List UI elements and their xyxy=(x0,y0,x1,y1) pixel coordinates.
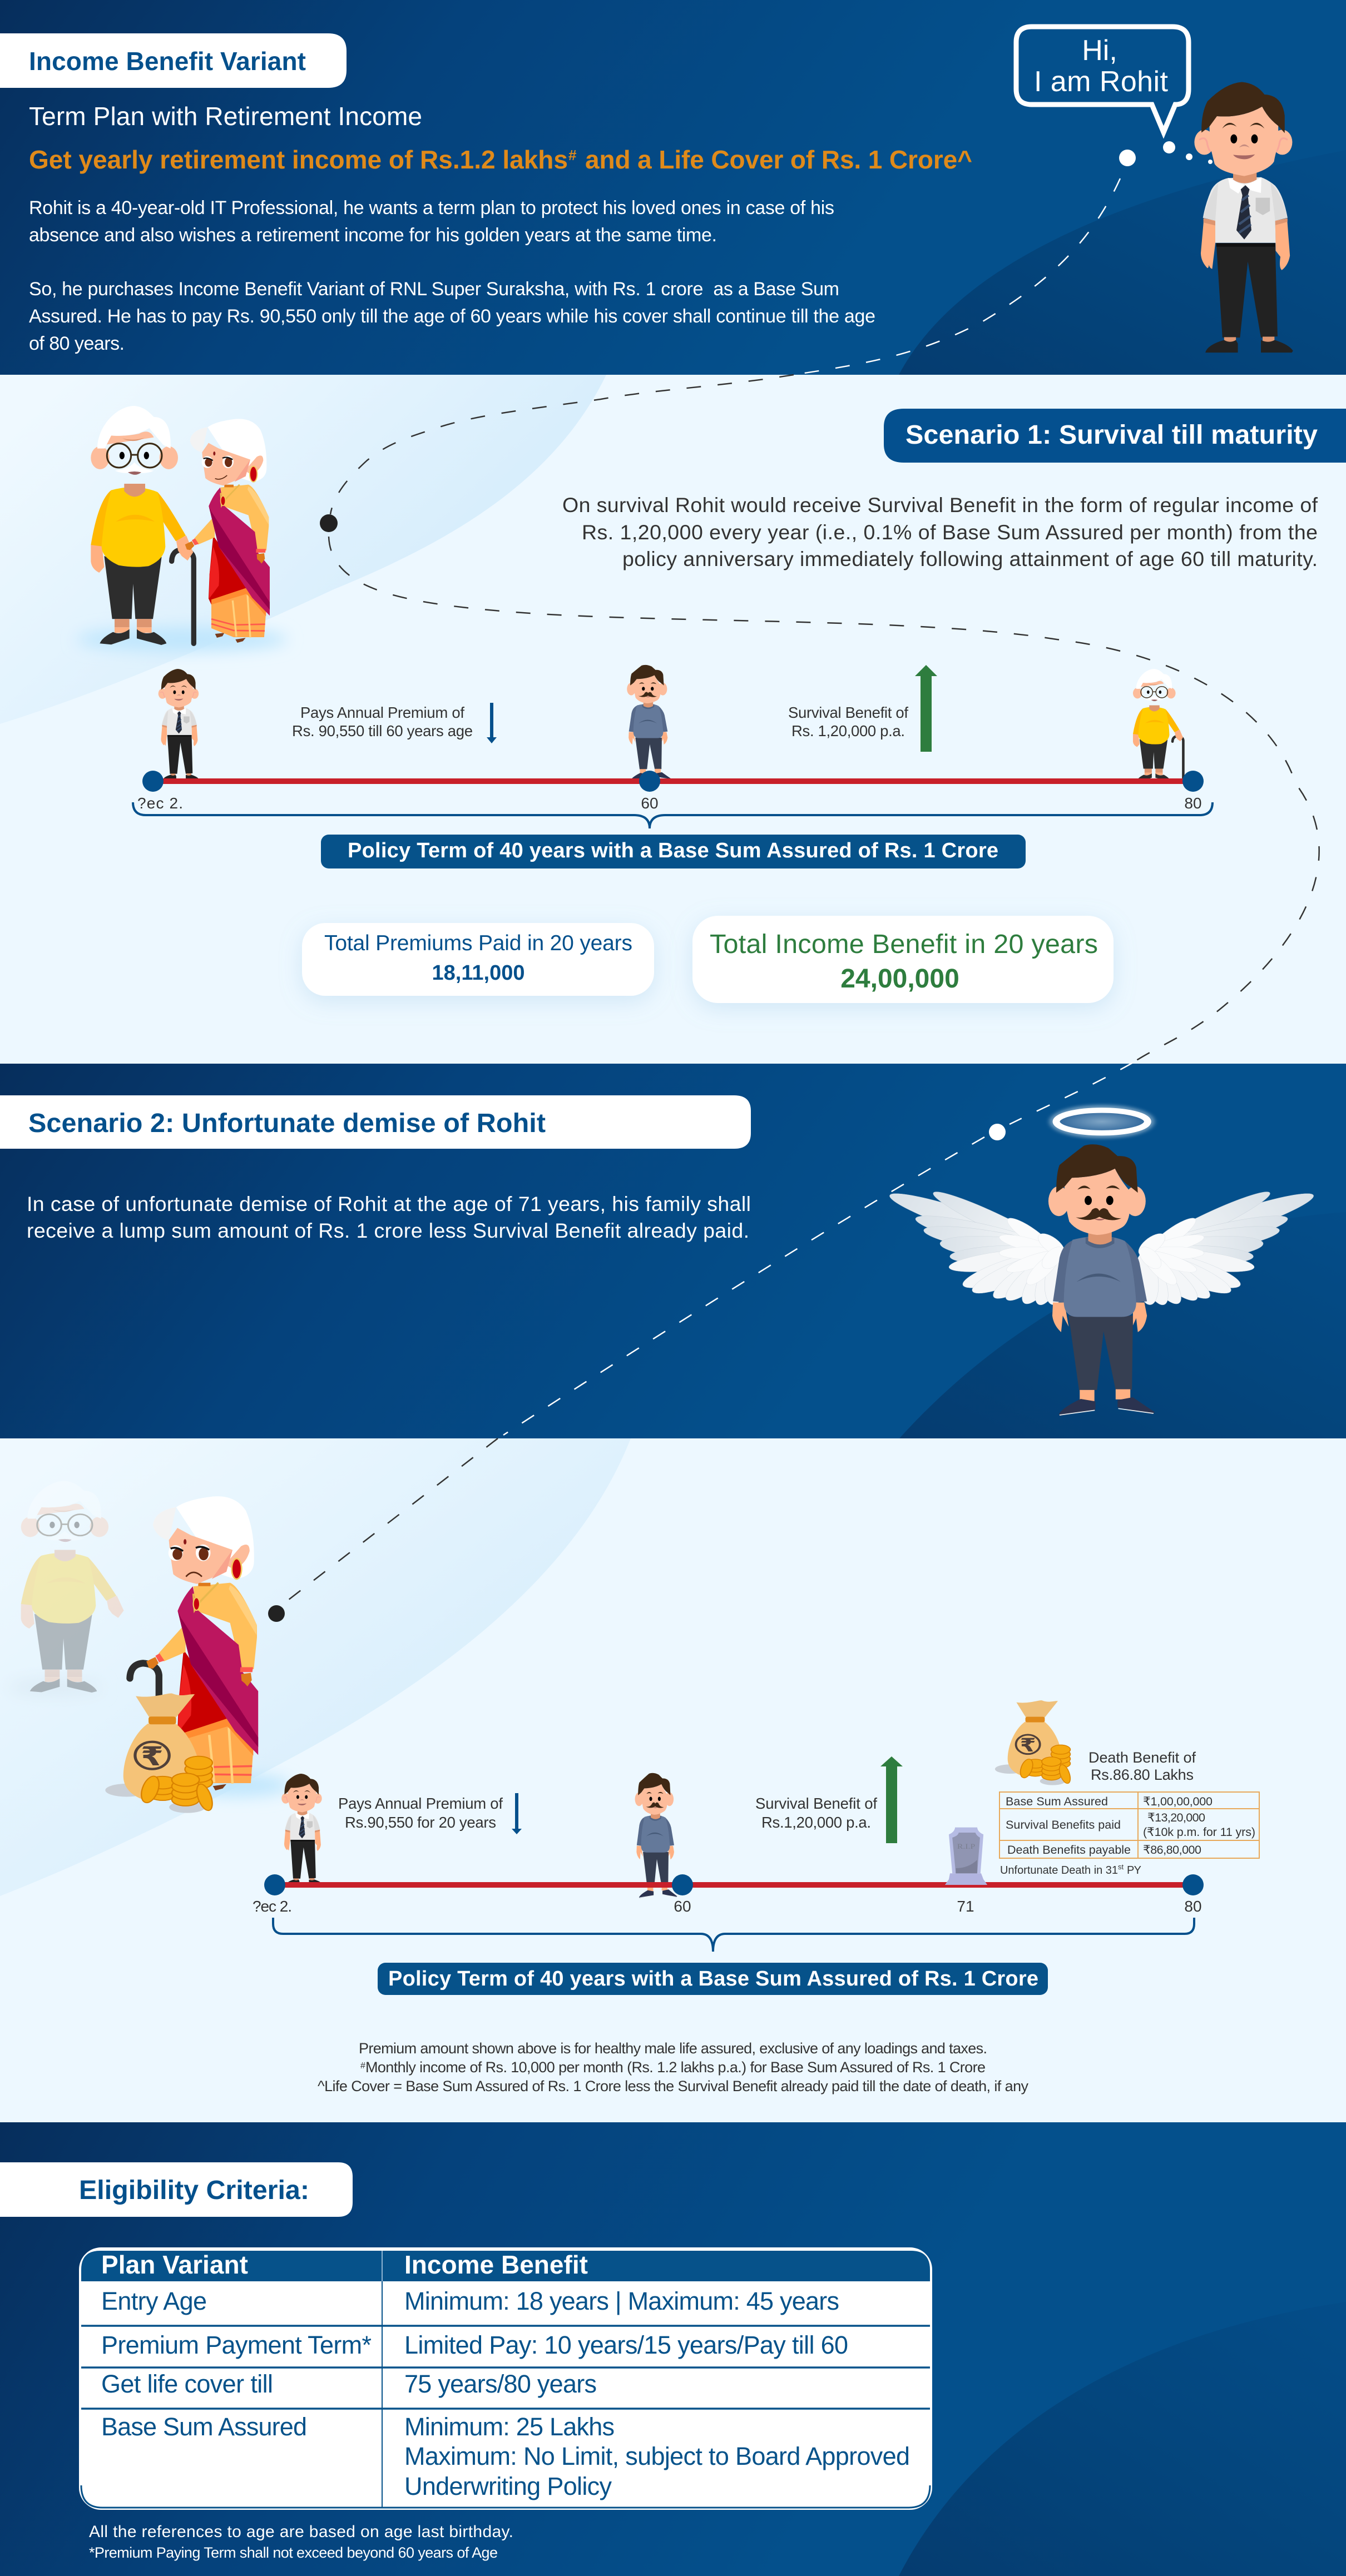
table: death benefit calculation: Survival Benefits paid xyxy=(1006,1818,1121,1832)
text block: Rohit story: Rohit is a 40-year-old IT Professional, he wants a term plan to protect his loved ones in case of his xyxy=(29,197,834,219)
text block: footnotes: Premium amount shown above is for healthy male life assured, exclusive of any loadings and taxes. xyxy=(359,2040,987,2057)
heading: income benefit variant xyxy=(0,33,347,88)
arrow: premium down xyxy=(512,1793,522,1834)
highlighted headline: Get yearly retirement income of Rs.1.2 lakhs xyxy=(29,145,568,174)
timeline: scenario 1: 80 xyxy=(1184,795,1202,812)
text block: footnotes: # xyxy=(360,2061,365,2071)
highlighted headline: and a Life Cover of Rs. 1 Crore^ xyxy=(585,145,972,174)
text block: scenario 2 description: In case of unfortunate demise of Rohit at the age of 71 years, his family shall xyxy=(27,1192,751,1215)
text block: Rohit story xyxy=(29,197,875,354)
figures: scenario 1 timeline xyxy=(159,665,1183,781)
label: survival benefit: Rs. 1,20,000 p.a. xyxy=(791,722,905,739)
timeline: scenario 2: ?ec 2. xyxy=(253,1898,292,1915)
table: eligibility: Minimum: 18 years | Maximum: 45 years xyxy=(404,2287,839,2315)
text block: scenario 1 description: policy anniversary immediately following attainment of age 60 till maturity. xyxy=(622,547,1318,570)
heading: scenario 2: Scenario 2: Unfortunate demise of Rohit xyxy=(28,1108,546,1138)
heading: income benefit variant: Income Benefit Variant xyxy=(29,47,306,76)
timeline: scenario 1: ?ec 2. xyxy=(137,795,183,812)
highlighted headline xyxy=(29,145,972,174)
text block: footnotes: ^Life Cover = Base Sum Assured of Rs. 1 Crore less the Survival Benefit already paid till the date of death, if any xyxy=(318,2078,1029,2094)
panel: eligibility xyxy=(0,2122,1346,2576)
heading: eligibility criteria xyxy=(0,2162,353,2217)
timeline: scenario 2: 60 xyxy=(674,1898,691,1915)
table: death benefit calculation xyxy=(999,1792,1259,1858)
label: policy term pill: Policy Term of 40 years with a Base Sum Assured of Rs. 1 Crore xyxy=(348,839,998,862)
timeline: scenario 1 xyxy=(137,771,1204,812)
panel: scenario 2 timeline xyxy=(0,1438,1346,2122)
table: eligibility: Base Sum Assured xyxy=(101,2413,307,2441)
connector: dashed journey line xyxy=(289,178,1319,1600)
label: unfortunate death: st xyxy=(1118,1863,1124,1871)
table: eligibility: Underwriting Policy xyxy=(404,2472,612,2500)
illustration: angel with wings and halo xyxy=(884,1108,1319,1416)
card: total income xyxy=(692,916,1114,1003)
table: death benefit calculation: Base Sum Assured xyxy=(1006,1795,1108,1808)
label: policy term pill xyxy=(321,835,1026,868)
panel: scenario 1 xyxy=(0,375,1346,1064)
text block: Rohit story: Assured. He has to pay Rs. 90,550 only till the age of 60 years while his cover shall continue till the age xyxy=(29,306,875,327)
table: death benefit calculation: ₹1,00,00,000 xyxy=(1143,1795,1213,1808)
text block: footnotes: Monthly income of Rs. 10,000 per month (Rs. 1.2 lakhs p.a.) for Base Sum Assured of Rs. 1 Crore xyxy=(365,2059,986,2076)
panel: introduction xyxy=(0,0,1346,375)
speech bubble xyxy=(1016,27,1189,132)
text block: scenario 1 description xyxy=(562,493,1318,570)
label: annual premium xyxy=(338,1795,503,1831)
table: eligibility: Premium Payment Term* xyxy=(101,2331,372,2359)
label: annual premium xyxy=(292,704,473,739)
text block: footnotes xyxy=(318,2040,1029,2094)
speech bubble: I am Rohit xyxy=(1034,66,1169,98)
label: annual premium: Rs.90,550 for 20 years xyxy=(345,1814,496,1831)
heading: scenario 1: Scenario 1: Survival till maturity xyxy=(905,420,1318,450)
heading: scenario 1 xyxy=(884,409,1346,463)
table: eligibility: Plan Variant xyxy=(101,2250,248,2279)
brace: policy term xyxy=(133,802,1213,828)
table: eligibility: 75 years/80 years xyxy=(404,2370,597,2398)
label: annual premium: Rs. 90,550 till 60 years age xyxy=(292,722,473,739)
card: total income: 24,00,000 xyxy=(840,964,959,994)
label: survival benefit: Survival Benefit of xyxy=(788,704,908,721)
highlighted headline: # xyxy=(568,147,577,163)
card: total premiums xyxy=(302,923,654,996)
icon: money bag xyxy=(995,1700,1072,1785)
icon: tombstone: R.I.P xyxy=(957,1843,975,1851)
arrow: benefit up xyxy=(915,665,937,752)
figures: scenario 2 timeline xyxy=(281,1773,677,1898)
table: death benefit calculation: (₹10k p.m. for 11 yrs) xyxy=(1143,1825,1255,1839)
table: eligibility: Maximum: No Limit, subject to Board Approved xyxy=(404,2442,910,2470)
table: eligibility: Get life cover till xyxy=(101,2370,273,2398)
heading: eligibility criteria: Eligibility Criteria: xyxy=(79,2175,309,2205)
card: total premiums: 18,11,000 xyxy=(432,961,524,985)
text block: Rohit story: of 80 years. xyxy=(29,333,125,354)
label: death benefit: Rs.86.80 Lakhs xyxy=(1091,1766,1194,1783)
icon: connector dots xyxy=(268,514,1006,1622)
table: eligibility: Limited Pay: 10 years/15 years/Pay till 60 xyxy=(404,2331,848,2359)
label: policy term pill: Policy Term of 40 years with a Base Sum Assured of Rs. 1 Crore xyxy=(388,1967,1038,1991)
panel: scenario 2 xyxy=(0,1064,1346,1438)
table: eligibility: Minimum: 25 Lakhs xyxy=(404,2413,615,2441)
card: total income: Total Income Benefit in 20 years xyxy=(710,929,1098,959)
label: survival benefit xyxy=(755,1795,877,1831)
subheading: term plan: Term Plan with Retirement Income xyxy=(29,102,422,131)
label: unfortunate death: Unfortunate Death in 31 xyxy=(1000,1864,1118,1877)
text block: Rohit story: absence and also wishes a retirement income for his golden years at the same time. xyxy=(29,225,717,246)
label: survival benefit: Rs.1,20,000 p.a. xyxy=(761,1814,871,1831)
timeline: scenario 1: 60 xyxy=(641,795,659,812)
table: death benefit calculation: ₹13,20,000 xyxy=(1147,1811,1205,1824)
text block: age notes: All the references to age are based on age last birthday. xyxy=(89,2523,513,2541)
icon: thought bubbles xyxy=(1119,141,1213,166)
heading: scenario 2 xyxy=(0,1095,751,1149)
illustration: Rohit xyxy=(1194,82,1293,353)
text block: Rohit story: So, he purchases Income Benefit Variant of RNL Super Suraksha, with Rs. 1 crore as a Base Sum xyxy=(29,279,839,300)
icon: tombstone xyxy=(945,1828,987,1885)
arrow: premium down xyxy=(487,703,497,743)
speech bubble: Hi, xyxy=(1082,34,1117,67)
label: annual premium: Pays Annual Premium of xyxy=(338,1795,503,1812)
label: survival benefit xyxy=(788,704,908,739)
card: total premiums: Total Premiums Paid in 20 years xyxy=(324,931,632,955)
table: eligibility: Entry Age xyxy=(101,2287,207,2315)
brace: policy term xyxy=(273,1918,1194,1952)
timeline: scenario 2: 71 xyxy=(957,1898,974,1915)
table: death benefit calculation: Death Benefits payable xyxy=(1007,1843,1131,1857)
text block: scenario 2 description xyxy=(27,1192,751,1242)
timeline: scenario 2 xyxy=(253,1874,1204,1915)
text block: scenario 2 description: receive a lump sum amount of Rs. 1 crore less Survival Benefit already paid. xyxy=(27,1219,749,1242)
text block: age notes: *Premium Paying Term shall not exceed beyond 60 years of Age xyxy=(89,2544,498,2561)
label: annual premium: Pays Annual Premium of xyxy=(300,704,464,721)
table: eligibility: Income Benefit xyxy=(404,2250,588,2279)
label: death benefit xyxy=(1088,1749,1196,1783)
arrow: benefit up xyxy=(880,1756,903,1843)
text block: scenario 1 description: On survival Rohit would receive Survival Benefit in the form of regular income of xyxy=(562,493,1318,517)
table: eligibility xyxy=(80,2249,931,2509)
illustration: elderly couple xyxy=(76,406,288,652)
label: unfortunate death: PY xyxy=(1127,1864,1141,1877)
timeline: scenario 2: 80 xyxy=(1184,1898,1202,1915)
label: survival benefit: Survival Benefit of xyxy=(755,1795,877,1812)
text block: scenario 1 description: Rs. 1,20,000 every year (i.e., 0.1% of Base Sum Assured per month) from the xyxy=(582,520,1318,544)
illustration: widow with money bag xyxy=(8,1481,291,1813)
text block: age notes xyxy=(89,2523,513,2561)
label: death benefit: Death Benefit of xyxy=(1088,1749,1196,1766)
table: death benefit calculation: ₹86,80,000 xyxy=(1143,1843,1201,1857)
